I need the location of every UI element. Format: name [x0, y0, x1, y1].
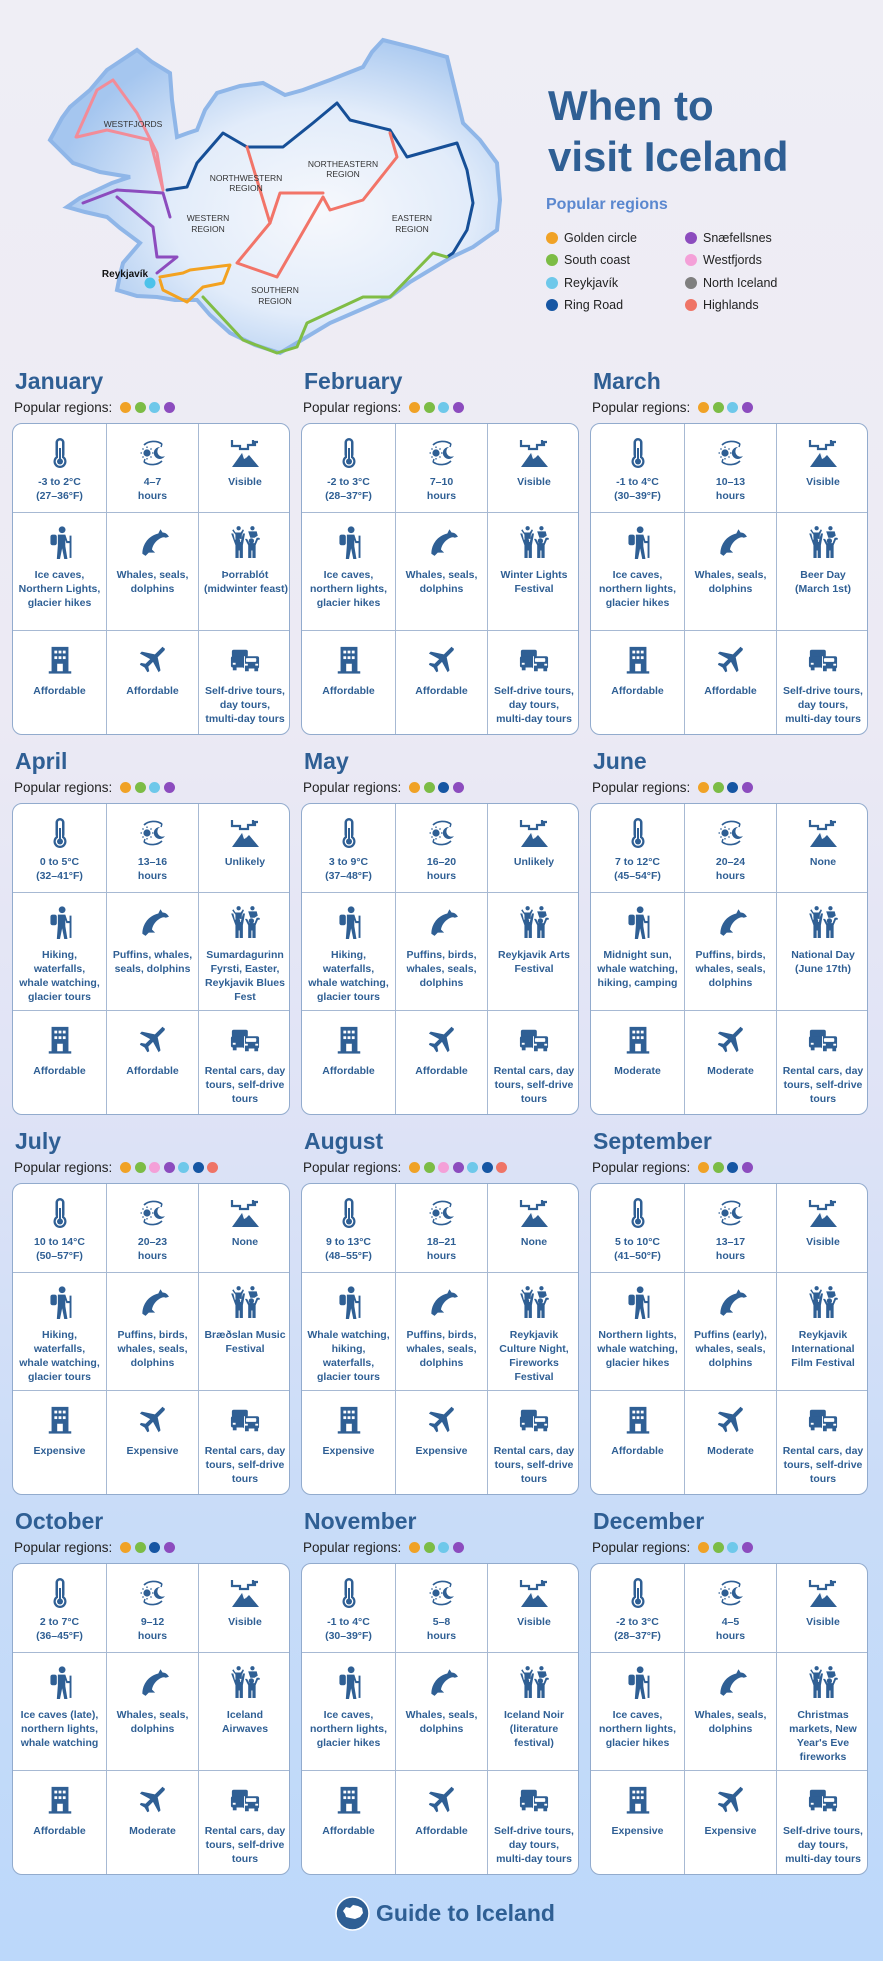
panel: December: Whales, seals, dolphins [695, 1709, 766, 1735]
panel: September: (41–50°F) [614, 1250, 661, 1262]
panel: March: (30–39°F) [614, 490, 661, 502]
panel: August: Expensive [323, 1445, 374, 1457]
panel: December: hours [716, 1630, 745, 1642]
panel: August: Popular regions: [303, 1160, 401, 1175]
map of Iceland: WESTERN [187, 213, 229, 223]
map of Iceland: SOUTHERN [251, 285, 299, 295]
title: visit Iceland [548, 133, 788, 180]
panel: August: Whale watching, hiking, waterfalls, glacier tours [307, 1329, 390, 1383]
panel: April: Affordable [33, 1065, 86, 1077]
panel: April [12, 748, 290, 1115]
panel: March: Visible [806, 476, 840, 488]
panel: December: (28–37°F) [614, 1630, 661, 1642]
panel: May [301, 748, 579, 1115]
panel: July: Rental cars, day tours, self-drive tours [205, 1445, 285, 1485]
panel: August: None [521, 1236, 547, 1248]
panel: June: (45–54°F) [614, 870, 661, 882]
legend: popular regions: Snæfellsnes [703, 231, 772, 245]
panel: April: Sumardagurinn Fyrsti, Easter, Reykjavik Blues Fest [205, 949, 285, 1003]
panel: October: Rental cars, day tours, self-drive tours [205, 1825, 285, 1865]
panel: September: 13–17 [716, 1236, 745, 1248]
panel: May: Reykjavik Arts Festival [498, 949, 570, 975]
panel: July: (50–57°F) [36, 1250, 83, 1262]
panel: April: Popular regions: [14, 780, 112, 795]
panel: October: October [15, 1508, 103, 1534]
panel: September: Popular regions: [592, 1160, 690, 1175]
legend: popular regions: Popular regions [546, 196, 668, 213]
panel: January: 4–7 [144, 476, 161, 488]
panel: November: hours [427, 1630, 456, 1642]
panel: May: Unlikely [514, 856, 554, 868]
map of Iceland [48, 38, 502, 356]
panel: October: (36–45°F) [36, 1630, 83, 1642]
panel: April: 13–16 [138, 856, 167, 868]
panel: September: September [593, 1128, 712, 1154]
panel: December: Expensive [705, 1825, 756, 1837]
panel: December: Self-drive tours, day tours, multi-day tours [783, 1825, 863, 1865]
panel: May: Affordable [415, 1065, 468, 1077]
footer logo [335, 1896, 555, 1931]
panel: May: 3 to 9°C [329, 856, 368, 868]
panel: July: None [232, 1236, 258, 1248]
panel: July [12, 1128, 290, 1495]
panel: April: Puffins, whales, seals, dolphins [113, 949, 192, 975]
panel: May: Hiking, waterfalls, whale watching, glacier tours [308, 949, 389, 1003]
panel: March: (March 1st) [795, 583, 851, 595]
panel: July: Puffins, birds, whales, seals, dolphins [117, 1329, 188, 1369]
panel: June [590, 748, 868, 1115]
panel: February [301, 368, 579, 735]
panel: January: Ice caves, Northern Lights, glacier hikes [19, 569, 100, 609]
panel: July: Expensive [34, 1445, 85, 1457]
panel: October [12, 1508, 290, 1875]
panel: June: 7 to 12°C [615, 856, 660, 868]
panel: August: (48–55°F) [325, 1250, 372, 1262]
panel: January: January [15, 368, 103, 394]
panel: November: (30–39°F) [325, 1630, 372, 1642]
panel: May: Popular regions: [303, 780, 401, 795]
panel: February: Winter Lights Festival [500, 569, 567, 595]
panel: December: -2 to 3°C [616, 1616, 659, 1628]
panel: January: Visible [228, 476, 262, 488]
panel: January: hours [138, 490, 167, 502]
panel: March: Whales, seals, dolphins [695, 569, 766, 595]
panel: February: (28–37°F) [325, 490, 372, 502]
panel: September: Visible [806, 1236, 840, 1248]
legend: popular regions: Golden circle [564, 231, 637, 245]
panel: October: hours [138, 1630, 167, 1642]
panel: September: Moderate [707, 1445, 754, 1457]
panel: April: (32–41°F) [36, 870, 83, 882]
panel: August: Expensive [416, 1445, 467, 1457]
panel: June: Rental cars, day tours, self-drive tours [783, 1065, 863, 1105]
panel: June: Midnight sun, whale watching, hiking, camping [597, 949, 678, 989]
panel: February: Self-drive tours, day tours, multi-day tours [494, 685, 574, 725]
panel: October: Moderate [129, 1825, 176, 1837]
panel: November: 5–8 [433, 1616, 450, 1628]
panel: February: Ice caves, northern lights, glacier hikes [310, 569, 387, 609]
map of Iceland: REGION [191, 224, 225, 234]
panel: May: (37–48°F) [325, 870, 372, 882]
panel: July: Hiking, waterfalls, whale watching, glacier tours [19, 1329, 100, 1383]
panel: November: Visible [517, 1616, 551, 1628]
panel: February: February [304, 368, 402, 394]
title [548, 82, 788, 180]
panel: April: Hiking, waterfalls, whale watching, glacier tours [19, 949, 100, 1003]
panel: October: 9–12 [141, 1616, 164, 1628]
panel: October: 2 to 7°C [40, 1616, 79, 1628]
legend: popular regions: Reykjavík [564, 276, 618, 290]
panel: December [590, 1508, 868, 1875]
panel: May: Affordable [322, 1065, 375, 1077]
panel: July: 20–23 [138, 1236, 167, 1248]
panel: June: Moderate [707, 1065, 754, 1077]
panel: November: Whales, seals, dolphins [406, 1709, 477, 1735]
title: When to [548, 82, 714, 129]
footer logo: Guide to Iceland [376, 1900, 555, 1926]
panel: January: (27–36°F) [36, 490, 83, 502]
panel: June: 20–24 [716, 856, 745, 868]
panel: May: Puffins, birds, whales, seals, dolphins [406, 949, 477, 989]
panel: May: May [304, 748, 349, 774]
panel: June: June [593, 748, 647, 774]
panel: October: Visible [228, 1616, 262, 1628]
panel: May: 16–20 [427, 856, 456, 868]
panel: October: Popular regions: [14, 1540, 112, 1555]
panel: March: Popular regions: [592, 400, 690, 415]
legend: popular regions: North Iceland [703, 276, 777, 290]
panel: February: Visible [517, 476, 551, 488]
panel: February: Whales, seals, dolphins [406, 569, 477, 595]
panel: July: Bræðslan Music Festival [204, 1329, 286, 1355]
panel: December: Expensive [612, 1825, 663, 1837]
panel: May: hours [427, 870, 456, 882]
panel: September [590, 1128, 868, 1495]
panel: December: 4–5 [722, 1616, 739, 1628]
panel: March: hours [716, 490, 745, 502]
panel: October: Ice caves (late), northern lights, whale watching [21, 1709, 98, 1749]
map of Iceland: NORTHWESTERN [210, 173, 282, 183]
panel: November [301, 1508, 579, 1875]
panel: November: Self-drive tours, day tours, multi-day tours [494, 1825, 574, 1865]
panel: January: -3 to 2°C [38, 476, 81, 488]
panel: June: Puffins, birds, whales, seals, dolphins [695, 949, 766, 989]
panel: September: Northern lights, whale watching, glacier hikes [597, 1329, 678, 1369]
legend: popular regions: South coast [564, 253, 630, 267]
panel: June: National Day (June 17th) [791, 949, 855, 975]
panel: November: Popular regions: [303, 1540, 401, 1555]
panel: September: Puffins (early), whales, seals, dolphins [694, 1329, 767, 1369]
panel: November: Ice caves, northern lights, glacier hikes [310, 1709, 387, 1749]
panel: August: 18–21 [427, 1236, 456, 1248]
panel: December: Visible [806, 1616, 840, 1628]
panel: November: Affordable [415, 1825, 468, 1837]
panel: December: December [593, 1508, 704, 1534]
panel: April: April [15, 748, 67, 774]
panel: July: Popular regions: [14, 1160, 112, 1175]
panel: November: Iceland Noir (literature festival) [504, 1709, 564, 1749]
panel: December: Christmas markets, New Year's Eve fireworks [789, 1709, 857, 1763]
panel: August: hours [427, 1250, 456, 1262]
panel: January: Affordable [33, 685, 86, 697]
panel: July: July [15, 1128, 61, 1154]
panel: September: 5 to 10°C [615, 1236, 660, 1248]
panel: January: Þorrablót (midwinter feast) [204, 569, 288, 595]
panel: July: hours [138, 1250, 167, 1262]
panel: August: August [304, 1128, 383, 1154]
panel: August: Reykjavik Culture Night, Fireworks Festival [499, 1329, 569, 1383]
panel: June: None [810, 856, 836, 868]
panel: June: Moderate [614, 1065, 661, 1077]
panel: April: Affordable [126, 1065, 179, 1077]
panel: September: Affordable [611, 1445, 664, 1457]
legend: popular regions: Westfjords [703, 253, 762, 267]
legend: popular regions: Ring Road [564, 298, 623, 312]
panel: August [301, 1128, 579, 1495]
panel: March [590, 368, 868, 735]
legend: popular regions: Highlands [703, 298, 759, 312]
panel: February: Popular regions: [303, 400, 401, 415]
panel: January: Whales, seals, dolphins [117, 569, 188, 595]
panel: May: Rental cars, day tours, self-drive tours [494, 1065, 574, 1105]
panel: September: Rental cars, day tours, self-drive tours [783, 1445, 863, 1485]
panel: July: 10 to 14°C [34, 1236, 85, 1248]
panel: November: -1 to 4°C [327, 1616, 370, 1628]
panel: August: Puffins, birds, whales, seals, dolphins [406, 1329, 477, 1369]
map of Iceland: REGION [229, 183, 263, 193]
panel: March: -1 to 4°C [616, 476, 659, 488]
panel: January: Popular regions: [14, 400, 112, 415]
panel: April: hours [138, 870, 167, 882]
panel: January: Self-drive tours, day tours, tmulti-day tours [205, 685, 285, 725]
panel: June: Popular regions: [592, 780, 690, 795]
map of Iceland: REGION [395, 224, 429, 234]
panel: March: Ice caves, northern lights, glacier hikes [599, 569, 676, 609]
panel: February: 7–10 [430, 476, 453, 488]
map of Iceland: EASTERN [392, 213, 432, 223]
map of Iceland: NORTHEASTERN [308, 159, 378, 169]
panel: March: Beer Day [800, 569, 846, 581]
panel: April: Rental cars, day tours, self-drive tours [205, 1065, 285, 1105]
panel: June: hours [716, 870, 745, 882]
map of Iceland: REGION [326, 169, 360, 179]
panel: March: Affordable [611, 685, 664, 697]
panel: August: 9 to 13°C [326, 1236, 371, 1248]
panel: March: March [593, 368, 661, 394]
map of Iceland: Reykjavík [102, 269, 149, 280]
panel: March: Affordable [704, 685, 757, 697]
panel: January: Affordable [126, 685, 179, 697]
panel: October: Iceland [227, 1709, 263, 1721]
map of Iceland: REGION [258, 296, 292, 306]
panel: October: Affordable [33, 1825, 86, 1837]
panel: February: hours [427, 490, 456, 502]
panel: February: Affordable [415, 685, 468, 697]
panel: December: Popular regions: [592, 1540, 690, 1555]
panel: March: Self-drive tours, day tours, multi-day tours [783, 685, 863, 725]
panel: November: November [304, 1508, 416, 1534]
panel: August: Rental cars, day tours, self-drive tours [494, 1445, 574, 1485]
panel: July: Expensive [127, 1445, 178, 1457]
panel: December: Ice caves, northern lights, glacier hikes [599, 1709, 676, 1749]
panel: February: Affordable [322, 685, 375, 697]
panel: October: Whales, seals, dolphins [117, 1709, 188, 1735]
panel: April: 0 to 5°C [40, 856, 79, 868]
panel: February: -2 to 3°C [327, 476, 370, 488]
panel: April: Unlikely [225, 856, 265, 868]
panel: September: hours [716, 1250, 745, 1262]
map of Iceland: WESTFJORDS [104, 119, 163, 129]
panel: November: Affordable [322, 1825, 375, 1837]
panel: October: Airwaves [222, 1723, 268, 1735]
panel: September: Reykjavik International Film Festival [791, 1329, 855, 1369]
panel: January [12, 368, 290, 735]
legend: popular regions [546, 196, 777, 312]
panel: March: 10–13 [716, 476, 745, 488]
